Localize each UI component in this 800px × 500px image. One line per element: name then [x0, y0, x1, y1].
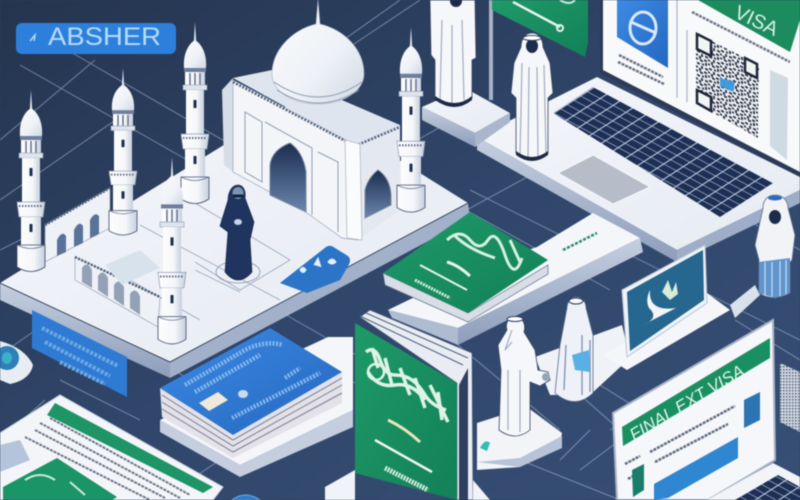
app caption lines [618, 55, 664, 84]
card chip [199, 392, 228, 411]
visa banner [698, 0, 800, 52]
booklet cover [383, 212, 548, 313]
lower laptop screen [613, 320, 775, 500]
laptop keyboard [553, 87, 773, 217]
lower laptop seal [632, 464, 644, 497]
mosque front facade [233, 80, 358, 240]
qr code [696, 33, 759, 138]
mosque side wall [355, 125, 400, 240]
small platform at top [422, 88, 510, 147]
card script [185, 343, 320, 418]
figure at right edge [755, 195, 795, 298]
figure: man in white robe, lower [498, 316, 550, 436]
card edges [160, 372, 342, 458]
booklet sword [420, 265, 467, 290]
green sign at top [489, 0, 588, 100]
dome [272, 0, 364, 104]
mosque [222, 0, 400, 240]
laptop trackpad [558, 155, 650, 204]
small white strip by right figure [730, 285, 760, 318]
floor plan lines [130, 200, 290, 320]
passport sword [375, 440, 432, 472]
mosque roof [233, 70, 400, 145]
title badge: Absher [16, 23, 176, 54]
courtyard plan detail [105, 250, 160, 285]
blue badge [280, 246, 350, 293]
figures platform [477, 407, 562, 470]
card seal [238, 390, 248, 398]
document green header [47, 403, 213, 493]
white base at lower left of passport [325, 470, 355, 500]
right mosque minaret [397, 27, 425, 212]
document green box [3, 458, 117, 500]
second minaret [109, 68, 137, 235]
front arch [270, 143, 306, 212]
laptop screen [600, 0, 800, 177]
figure: woman in dark abaya [216, 185, 260, 283]
blue sign at left [32, 310, 127, 397]
front minaret [158, 157, 186, 344]
laptop base [477, 77, 800, 262]
large green passport [355, 310, 473, 500]
figure: veiled figure with blue garment [555, 297, 593, 402]
blue card stack [160, 328, 353, 477]
rear minaret [181, 22, 209, 204]
side photo strip [770, 70, 788, 160]
passport calligraphy [366, 348, 448, 422]
lower laptop banner: FINAL EXT VISA [626, 361, 747, 444]
card face [160, 328, 342, 435]
lower right laptop [613, 320, 775, 500]
blue app icon [617, 0, 668, 68]
booklet platform [388, 213, 643, 345]
visa text lines [692, 12, 790, 62]
main white platform [0, 98, 470, 378]
green passport booklet [383, 212, 643, 345]
platform under large passport [473, 480, 490, 500]
passport cover [355, 323, 457, 500]
lower laptop text lines [625, 406, 735, 479]
passport pages [360, 310, 473, 500]
sign stand base [603, 293, 730, 370]
lower laptop blue panel [654, 437, 738, 500]
blue seal at bottom [232, 495, 260, 500]
document at bottom left [0, 395, 223, 500]
left minaret [17, 90, 45, 272]
booklet pages [383, 265, 548, 322]
round badge at left edge [0, 341, 33, 384]
strip connecting to sign base [535, 325, 630, 395]
crescent mark [643, 290, 676, 325]
figure: man with headscarf beside laptop [511, 33, 553, 161]
booklet calligraphy [447, 234, 522, 269]
facade recessed panels [245, 112, 338, 232]
document text lines [25, 418, 190, 500]
grey mesh device at right edge [780, 363, 800, 432]
document photo [0, 440, 30, 472]
side arch [365, 170, 391, 218]
lower laptop banner [622, 338, 770, 446]
small blue screen with crescent [622, 245, 707, 357]
passport caption [385, 468, 428, 490]
mosque rear wall [222, 78, 233, 172]
passport emblem [388, 420, 420, 442]
front arcade wall [75, 257, 160, 327]
roof frieze [233, 82, 400, 146]
visa banner: VISA [731, 2, 782, 41]
card platform [160, 337, 353, 477]
laptop at top right [477, 0, 800, 262]
left arcade wall [45, 188, 110, 262]
keyboard corner at bottom right [707, 463, 800, 500]
mosque corner pillar [345, 140, 362, 240]
lower laptop blue stamp [744, 392, 760, 428]
figure: man in white robe, top [430, 0, 476, 107]
title badge: Absher: ABSHER [48, 23, 161, 51]
